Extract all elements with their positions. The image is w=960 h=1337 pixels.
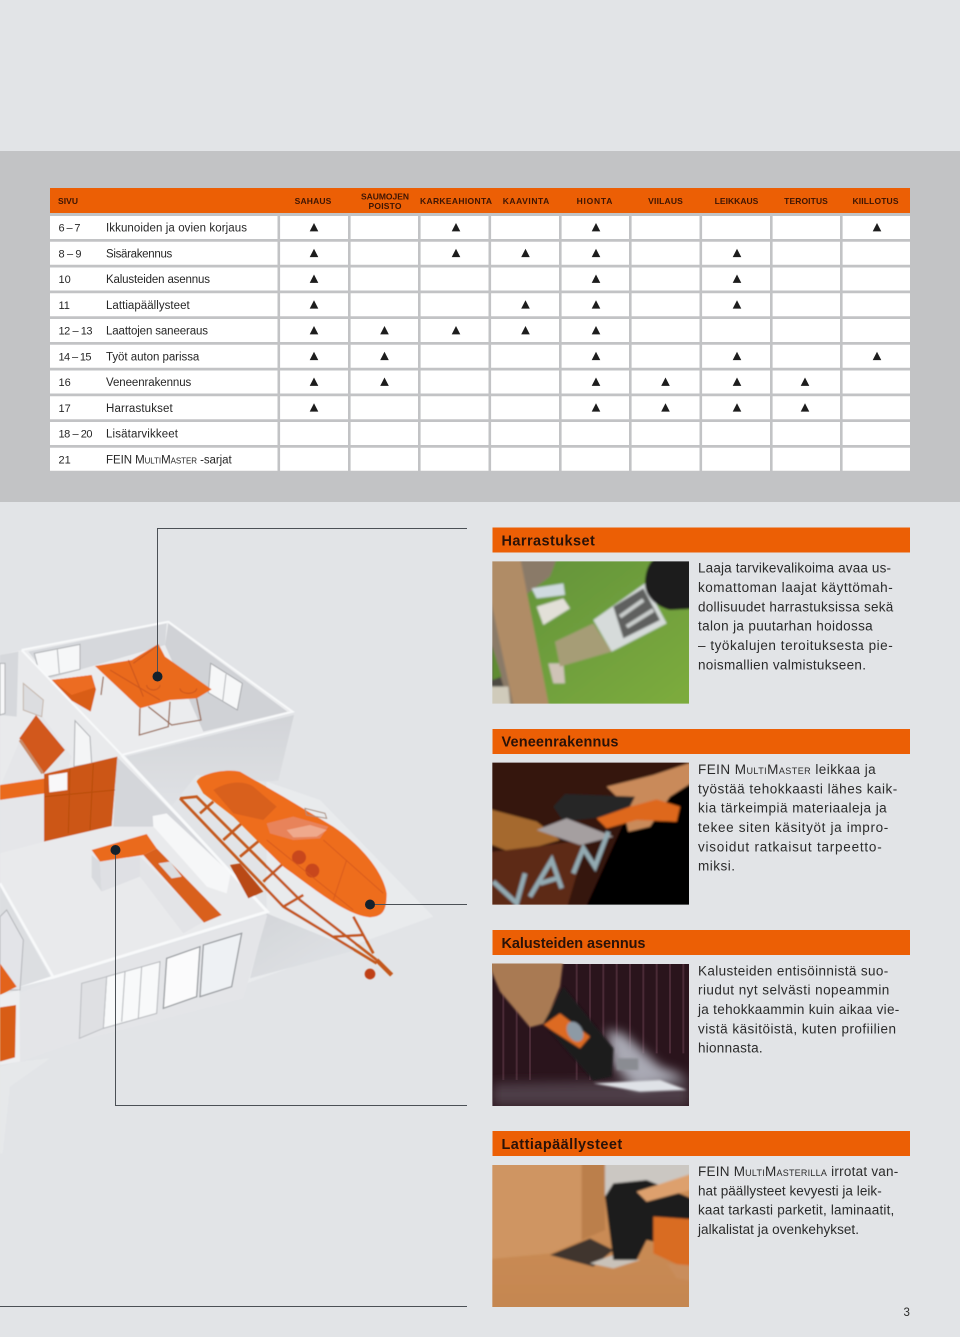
text: Veneenrakennus: työstää tehokkaasti lähes kaik- xyxy=(698,781,897,796)
orange leaning board xyxy=(19,715,65,774)
table row names: Harrastukset xyxy=(106,403,173,415)
text: Lattiapäällysteet xyxy=(697,1164,898,1237)
table row names: Laattojen saneeraus xyxy=(106,326,208,338)
table row names xyxy=(106,222,247,466)
table cells xyxy=(50,214,910,472)
grey table band xyxy=(0,151,960,502)
table header bar: SAUMOJEN xyxy=(361,192,409,202)
white wall tops xyxy=(0,622,293,990)
orange bench xyxy=(52,675,96,712)
lower left wall remnant xyxy=(0,1058,50,1153)
table header bar: KAAVINTA xyxy=(503,196,549,206)
heading: Veneenrakennus: Veneenrakennus xyxy=(502,734,618,750)
table header bar xyxy=(50,188,910,213)
heading: Veneenrakennus xyxy=(492,729,910,754)
text: Lattiapäällysteet: jalkalistat ja ovenkehykset. xyxy=(697,1222,859,1237)
table page numbers: 12 – 13 xyxy=(58,326,92,338)
text: Veneenrakennus: FEIN MultiMaster leikkaa ja xyxy=(698,762,876,777)
photo: tool cutting flooring xyxy=(492,1165,689,1307)
heading: Kalusteiden asennus xyxy=(492,930,910,955)
table page numbers: 10 xyxy=(58,274,71,286)
room: top right xyxy=(22,622,292,755)
boat on trailer xyxy=(180,771,392,979)
text: Harrastukset: talon ja puutarhan hoidossa xyxy=(698,619,873,634)
text: Harrastukset: dollisuudet harrastuksissa sekä xyxy=(698,599,894,614)
text: Harrastukset: Laaja tarvikevalikoima avaa us- xyxy=(698,561,891,576)
hull xyxy=(197,771,387,917)
table header bar: LEIKKAUS xyxy=(715,196,759,206)
table header bar: KARKEAHIONTA xyxy=(420,196,492,206)
orange work table xyxy=(95,644,212,735)
photo: tool on boat hull xyxy=(492,762,689,905)
table row names: Veneenrakennus xyxy=(106,377,192,389)
orange door panel and shelf xyxy=(0,757,117,842)
heading: Harrastukset: Harrastukset xyxy=(502,534,595,550)
text: Harrastukset: komattoman laajat käyttömah- xyxy=(698,580,893,595)
text: Kalusteiden asennus xyxy=(697,963,899,1056)
leader dots xyxy=(110,672,375,910)
text: Lattiapäällysteet: FEIN MultiMasterilla irrotat van- xyxy=(698,1164,898,1179)
panel: Veneenrakennus xyxy=(492,729,910,905)
photo: tool sanding furniture xyxy=(487,960,689,1106)
table page numbers: 14 – 15 xyxy=(58,351,92,363)
illustration: house cutaway with orange work areas xyxy=(0,622,433,1153)
text: Veneenrakennus xyxy=(698,762,897,874)
text: Veneenrakennus: miksi. xyxy=(698,859,735,874)
text: Veneenrakennus: kia tärkeimpiä materiaaleja ja xyxy=(698,801,887,816)
table header bar: TEROITUS xyxy=(784,196,828,206)
table row names: Lattiapäällysteet xyxy=(106,300,190,312)
front exterior wall with windows xyxy=(18,915,267,1062)
panel: Harrastukset xyxy=(492,528,910,704)
table triangle markers xyxy=(310,223,881,412)
text: Kalusteiden asennus: Kalusteiden entisöinnistä suo- xyxy=(698,963,888,978)
ground pad under boat xyxy=(247,782,433,983)
text: Harrastukset: – työkalujen teroituksesta pie- xyxy=(698,638,893,653)
table header bar: KIILLOTUS xyxy=(852,196,899,206)
table header bar: SAHAUS xyxy=(295,196,332,206)
table page numbers: 21 xyxy=(58,454,71,466)
table header bar: SIVU xyxy=(58,196,78,206)
table row names: Ikkunoiden ja ovien korjaus xyxy=(106,222,247,234)
heading: Harrastukset xyxy=(492,528,910,552)
text: Kalusteiden asennus: vistä käsitöistä, kuten profiilien xyxy=(698,1021,896,1036)
leader lines xyxy=(116,528,467,1106)
table header bar: HIONTA xyxy=(577,196,612,206)
orange kitchen counter xyxy=(92,834,222,923)
heading: Lattiapäällysteet xyxy=(492,1131,910,1156)
text: Veneenrakennus: tekee siten käsityöt ja impro- xyxy=(698,820,888,835)
panel: Kalusteiden asennus xyxy=(487,930,910,1106)
heading: Kalusteiden asennus: Kalusteiden asennus xyxy=(502,936,646,952)
table row names: Työt auton parissa xyxy=(106,351,200,363)
table page numbers: 11 xyxy=(58,300,70,312)
text: Kalusteiden asennus: ja tehokkaammin kuin aikaa vie- xyxy=(697,1002,899,1017)
page number: 3 xyxy=(904,1307,910,1319)
text: Harrastukset: noismallien valmistukseen. xyxy=(698,657,866,672)
heading: Lattiapäällysteet: Lattiapäällysteet xyxy=(502,1137,622,1153)
table page numbers: 18 – 20 xyxy=(58,428,92,440)
text: Lattiapäällysteet: kaat tarkasti parketit, laminaatit, xyxy=(698,1203,894,1218)
table header bar: VIILAUS xyxy=(648,196,683,206)
text: Harrastukset xyxy=(698,561,894,672)
trailer frame xyxy=(180,797,392,975)
text: Veneenrakennus: visoidut ratkaisut tarpeetto- xyxy=(698,839,882,854)
table: application matrix xyxy=(50,188,910,472)
table row names: FEIN MultiMaster -sarjat xyxy=(106,454,232,466)
table header bar: POISTO xyxy=(368,201,402,211)
table row names: Sisärakennus xyxy=(106,248,173,260)
text: Kalusteiden asennus: riudut nyt selvästi nopeammin xyxy=(698,983,889,998)
text: Kalusteiden asennus: hionnasta. xyxy=(698,1041,763,1056)
exterior wall below top room xyxy=(126,715,294,808)
table row names: Lisätarvikkeet xyxy=(106,428,179,440)
table page numbers xyxy=(58,222,92,466)
photo: sharpening tool on green xyxy=(492,561,689,704)
table row names: Kalusteiden asennus xyxy=(106,274,210,286)
table page numbers: 6 – 7 xyxy=(58,222,80,234)
panel: Lattiapäällysteet xyxy=(480,1131,910,1320)
kitchen cabinet xyxy=(92,813,231,933)
room: left and kitchen floor xyxy=(0,650,267,977)
text: Lattiapäällysteet: hat päällysteet kevyesti ja leik- xyxy=(698,1183,882,1198)
table page numbers: 8 – 9 xyxy=(58,248,82,260)
table page numbers: 17 xyxy=(58,403,71,415)
table page numbers: 16 xyxy=(58,377,71,389)
lower left rooms with orange pieces xyxy=(0,887,50,1065)
bottom rule xyxy=(0,1306,467,1307)
